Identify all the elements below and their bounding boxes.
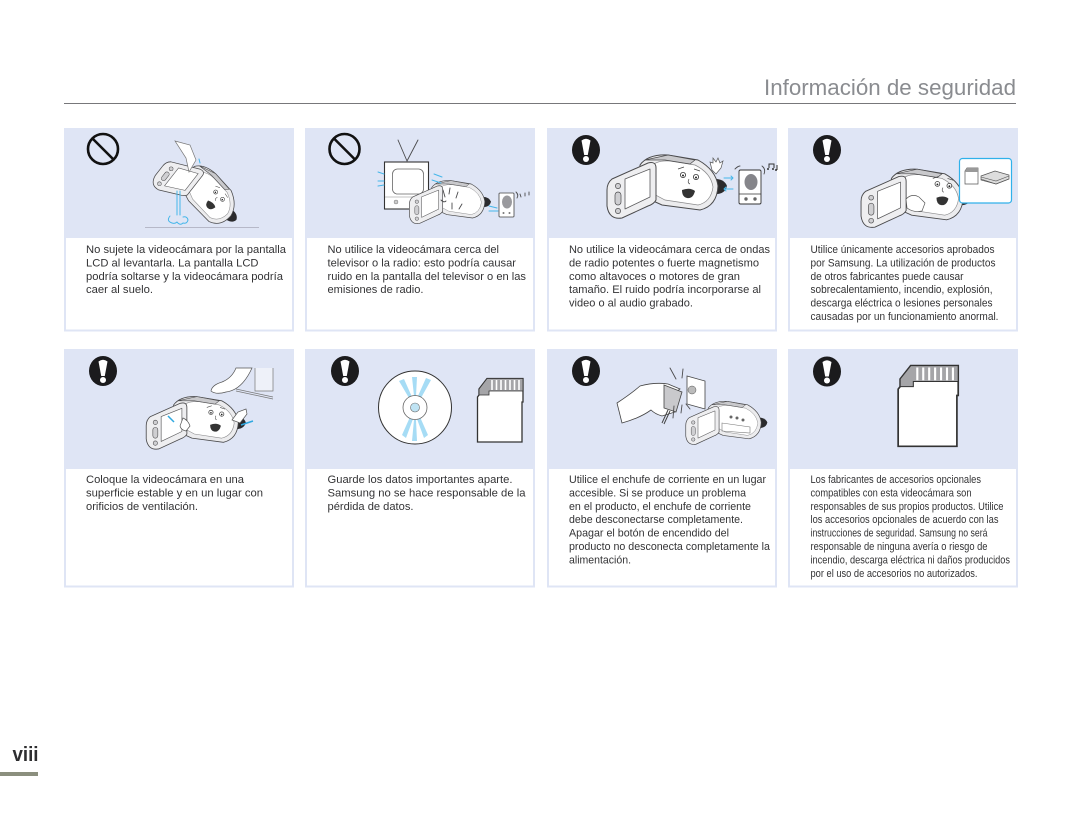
callout: accessories box bbox=[960, 158, 1012, 203]
text block: ruido en la pantalla del televisor o en las bbox=[328, 271, 527, 283]
illustration: camera with accessories bbox=[861, 158, 1012, 227]
page number: viii bbox=[12, 744, 38, 766]
text block: Guarde los datos importantes aparte. bbox=[328, 474, 512, 486]
text block: orificios de ventilación. bbox=[86, 501, 198, 513]
text block bbox=[569, 244, 770, 310]
illustration: television, camera and speaker bbox=[378, 140, 529, 224]
icon: warning bbox=[331, 356, 359, 386]
text block: video o al audio grabado. bbox=[569, 298, 693, 310]
text block: responsables de sus propios productos. Utilice bbox=[810, 501, 1004, 513]
panel: accesorios opcionales bbox=[788, 349, 1018, 586]
text block bbox=[86, 244, 287, 296]
text block bbox=[810, 474, 1010, 580]
panel: no usar cerca del televisor bbox=[305, 128, 535, 330]
text block bbox=[810, 244, 998, 323]
text block: No sujete la videocámara por la pantalla bbox=[86, 244, 287, 256]
illustration: memory card bbox=[898, 366, 958, 446]
text block: emisiones de radio. bbox=[328, 284, 424, 296]
panel: lugar estable y ventilado bbox=[64, 349, 294, 586]
text block: Los fabricantes de accesorios opcionales bbox=[810, 474, 981, 486]
icon: warning bbox=[813, 356, 841, 386]
panel: accesorios aprobados bbox=[788, 128, 1018, 330]
illustration: memory card bbox=[478, 378, 523, 442]
text block: accesible. Si se produce un problema bbox=[569, 487, 747, 499]
panel: enchufe accesible bbox=[547, 349, 777, 586]
text block: instrucciones de seguridad. Samsung no será bbox=[810, 528, 988, 540]
text block: Coloque la videocámara en una bbox=[86, 474, 245, 486]
text block: incendio, descarga eléctrica ni daños producidos bbox=[810, 554, 1010, 566]
text block: descarga eléctrica o lesiones personales bbox=[810, 298, 992, 310]
icon: warning bbox=[813, 135, 841, 165]
text block: superficie estable y en un lugar con bbox=[86, 487, 263, 499]
icon: warning bbox=[572, 356, 600, 386]
text block: tamaño. El ruido podría incorporarse al bbox=[569, 284, 761, 296]
text block: caer al suelo. bbox=[86, 284, 153, 296]
illustration: camera lifted by LCD bbox=[145, 141, 259, 239]
text block bbox=[328, 474, 526, 513]
text block: los accesorios opcionales de acuerdo con las bbox=[810, 514, 998, 526]
panel: no levantar por la pantalla bbox=[64, 128, 294, 330]
illustration: disc bbox=[378, 371, 452, 444]
icon: prohibition bbox=[88, 134, 118, 164]
text block: No utilice la videocámara cerca del bbox=[328, 244, 499, 256]
page number bar bbox=[0, 772, 38, 776]
title: Información de seguridad bbox=[764, 75, 1016, 100]
text block: alimentación. bbox=[569, 554, 631, 566]
text block: compatibles con esta videocámara son bbox=[810, 487, 972, 499]
text block bbox=[569, 474, 771, 566]
panel: no usar cerca de ondas de radio bbox=[547, 128, 777, 330]
text block: de radio potentes o fuerte magnetismo bbox=[569, 257, 759, 269]
illustration: hand unplugging, camera bbox=[617, 368, 767, 444]
illustration: camera beside speaker bbox=[607, 155, 777, 218]
text block: debe desconectarse completamente. bbox=[569, 514, 743, 526]
text block: No utilice la videocámara cerca de ondas bbox=[569, 244, 770, 256]
text block: LCD al levantarla. La pantalla LCD bbox=[86, 257, 259, 269]
text block: causadas por un funcionamiento anormal. bbox=[810, 311, 998, 323]
text block: pérdida de datos. bbox=[328, 501, 414, 513]
text block: de otros fabricantes puede causar bbox=[810, 271, 964, 283]
icon: warning bbox=[572, 135, 600, 165]
text block: Apagar el botón de encendido del bbox=[569, 528, 729, 540]
text block: como altavoces o motores de gran bbox=[569, 271, 740, 283]
text block bbox=[86, 474, 263, 513]
text block: televisor o la radio: esto podría causar bbox=[328, 257, 516, 269]
panel: copia de datos bbox=[305, 349, 535, 586]
text block bbox=[328, 244, 527, 296]
text block: por Samsung. La utilización de productos bbox=[810, 257, 996, 269]
text block: sobrecalentamiento, incendio, explosión, bbox=[810, 284, 992, 296]
text block: en el producto, el enchufe de corriente bbox=[569, 501, 751, 513]
text block: podría soltarse y la videocámara podría bbox=[86, 271, 284, 283]
icon: warning bbox=[89, 356, 117, 386]
text block: Utilice únicamente accesorios aprobados bbox=[810, 244, 994, 256]
illustration: camera near window bbox=[146, 368, 273, 449]
text block: responsable de ninguna avería o riesgo de bbox=[810, 541, 988, 553]
text block: por el uso de accesorios no autorizados. bbox=[810, 568, 978, 580]
icon: prohibition bbox=[330, 134, 360, 164]
text block: producto no desconecta completamente la bbox=[569, 541, 771, 553]
text block: Utilice el enchufe de corriente en un lugar bbox=[569, 474, 766, 486]
text block: Samsung no se hace responsable de la bbox=[328, 487, 526, 499]
